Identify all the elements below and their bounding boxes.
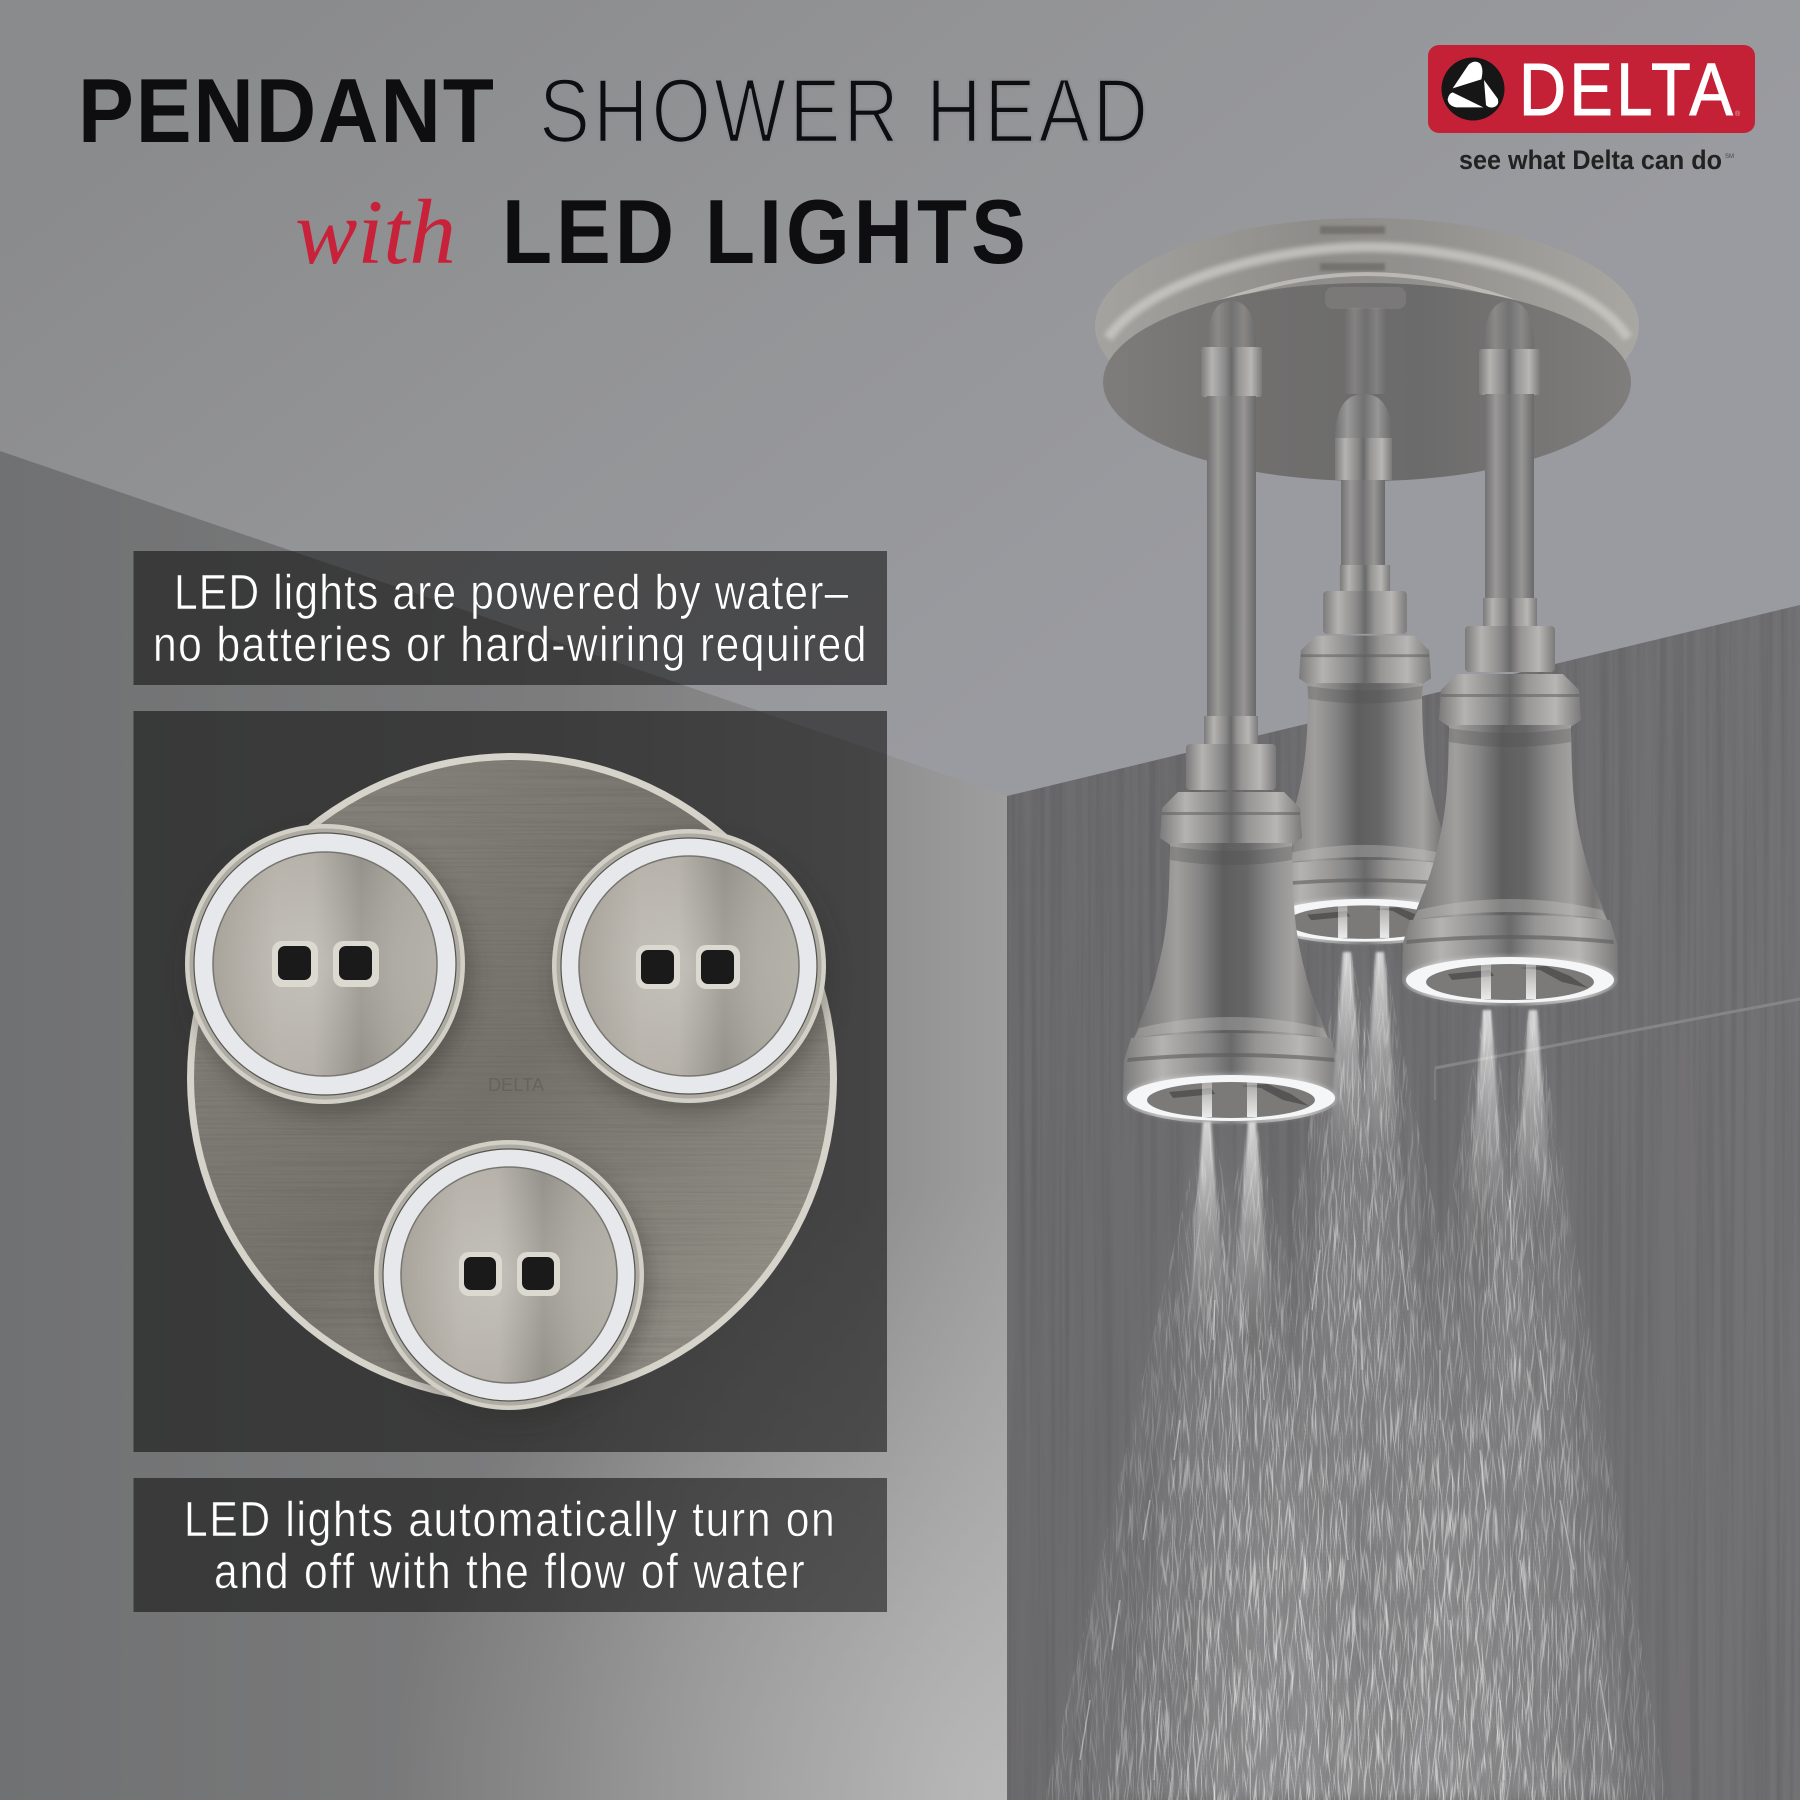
plate DELTA mark: DELTA [488, 1075, 544, 1095]
background: ceiling [0, 0, 1800, 810]
logo: Delta [1428, 45, 1755, 175]
head left [185, 824, 470, 1115]
background: left wall [0, 451, 1007, 1800]
nozzle pair left [272, 941, 379, 987]
logo registered mark: ® [1735, 110, 1741, 118]
nozzle pair right [636, 945, 740, 989]
pendant back: stem and bell [1265, 287, 1465, 944]
plate [170, 740, 850, 1420]
title line 1 bold: PENDANT [78, 60, 494, 162]
panel: underside of shower plate [134, 711, 887, 1452]
logo service mark: SM [1725, 154, 1734, 160]
title line 1 light: SHOWER HEAD [539, 60, 1148, 161]
water spray [1044, 952, 1667, 1800]
caption text line 1: LED lights are powered by water– [174, 564, 849, 620]
title line 2 bold: LED LIGHTS [502, 182, 1026, 283]
title [78, 60, 1148, 283]
caption text line 1: LED lights automatically turn on [184, 1491, 835, 1547]
logo emblem [1442, 58, 1504, 120]
pendant right: stem and bell [1402, 301, 1618, 1006]
head bottom [374, 1140, 648, 1419]
caption text line 2: and off with the flow of water [214, 1543, 805, 1599]
head right [552, 829, 830, 1113]
caption panel: powered by water [134, 551, 887, 685]
water jets: bright cores at nozzles [1188, 952, 1552, 1330]
pendant left: stem and bell [1123, 301, 1339, 1124]
background: right tiled wall [1007, 600, 1800, 1800]
caption panel: automatic on and off [134, 1478, 887, 1612]
logo wordmark: DELTA [1519, 48, 1733, 131]
logo tagline: see what Delta can do [1459, 145, 1722, 175]
logo badge [1428, 45, 1755, 133]
nozzle pair bottom [459, 1252, 560, 1296]
caption text line 2: no batteries or hard-wiring required [153, 616, 866, 672]
ceiling canopy [1095, 218, 1639, 481]
title line 2 script word: with [295, 181, 456, 283]
